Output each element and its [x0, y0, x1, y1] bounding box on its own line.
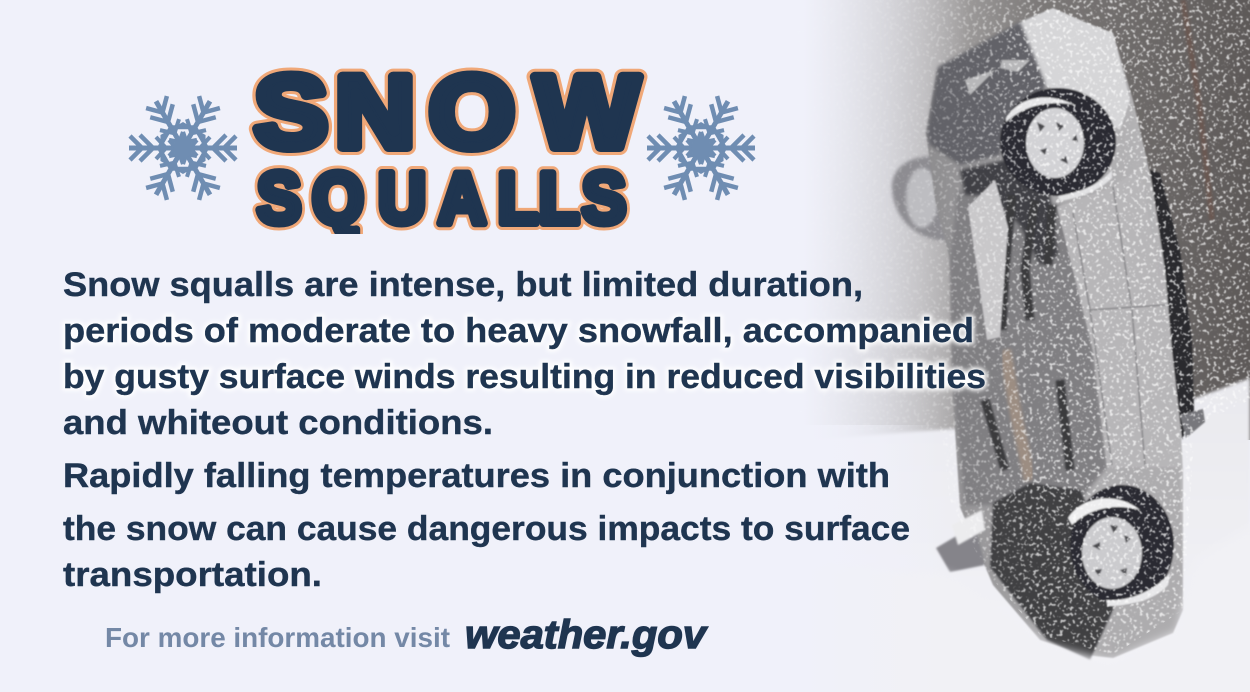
dark mass below top wheel	[960, 160, 1058, 265]
description paragraph 2	[63, 457, 910, 594]
title: SNOW	[254, 56, 640, 169]
description text halo	[63, 312, 986, 396]
snowflake left	[110, 75, 256, 221]
mirror	[1180, 409, 1205, 438]
title	[254, 56, 640, 239]
description paragraph 2: the snow can cause dangerous impacts to surface	[63, 510, 910, 548]
bottom rim	[1082, 517, 1142, 589]
lower rocker	[1107, 467, 1183, 658]
car	[892, 8, 1205, 660]
snowy hood	[1018, 8, 1130, 130]
description paragraph 1: Snow squalls are intense, but limited duration,	[63, 266, 863, 304]
description paragraph 1: and whiteout conditions.	[63, 404, 493, 442]
exhaust and axle	[1005, 350, 1030, 480]
description paragraph 1: periods of moderate to heavy snowfall, accompanied	[63, 312, 974, 350]
wiper strip	[1150, 170, 1194, 440]
falling snow speckle	[892, 0, 1250, 654]
description paragraph 2: transportation.	[63, 556, 322, 594]
windshield and grille	[927, 22, 1045, 165]
bottom fender snow	[1068, 498, 1140, 525]
left fade over photo	[780, 0, 970, 692]
door panels	[1057, 167, 1180, 467]
description text halo: by gusty surface winds resulting in reduced visibilities	[63, 358, 986, 396]
car body	[926, 8, 1183, 658]
top tyre	[1000, 88, 1116, 196]
footer link line: For more information visit	[105, 622, 450, 653]
ground fade into page background	[760, 425, 940, 692]
underside dark tendrils	[985, 195, 1070, 470]
description paragraph 2: Rapidly falling temperatures in conjunction with	[63, 457, 890, 495]
footer link line: weather.gov	[465, 613, 709, 657]
snowy ground	[780, 378, 1250, 692]
description text halo: periods of moderate to heavy snowfall, accompanied	[63, 312, 974, 350]
title: SQUALLS	[257, 157, 626, 239]
top rim	[1026, 108, 1084, 178]
underside lower dark	[990, 483, 1113, 660]
title: SNOW	[254, 56, 640, 169]
snowflake right	[628, 75, 774, 221]
photo: overturned car in snow squall	[833, 0, 1250, 661]
bottom tyre	[1070, 485, 1174, 605]
description paragraph 1: by gusty surface winds resulting in reduced visibilities	[63, 358, 986, 396]
tree trunk	[1183, 0, 1212, 220]
description paragraph 1	[63, 266, 986, 442]
light hood highlights	[965, 60, 1030, 95]
rear wheel in snow	[936, 525, 985, 572]
title: SQUALLS	[257, 157, 626, 239]
side panel	[968, 180, 1008, 340]
footer link line	[105, 613, 709, 657]
snow drift	[770, 520, 1250, 692]
far wheel	[892, 157, 958, 241]
top fender snow	[1006, 97, 1075, 122]
underside mid grey	[950, 190, 1107, 505]
forest backdrop	[780, 0, 1250, 440]
